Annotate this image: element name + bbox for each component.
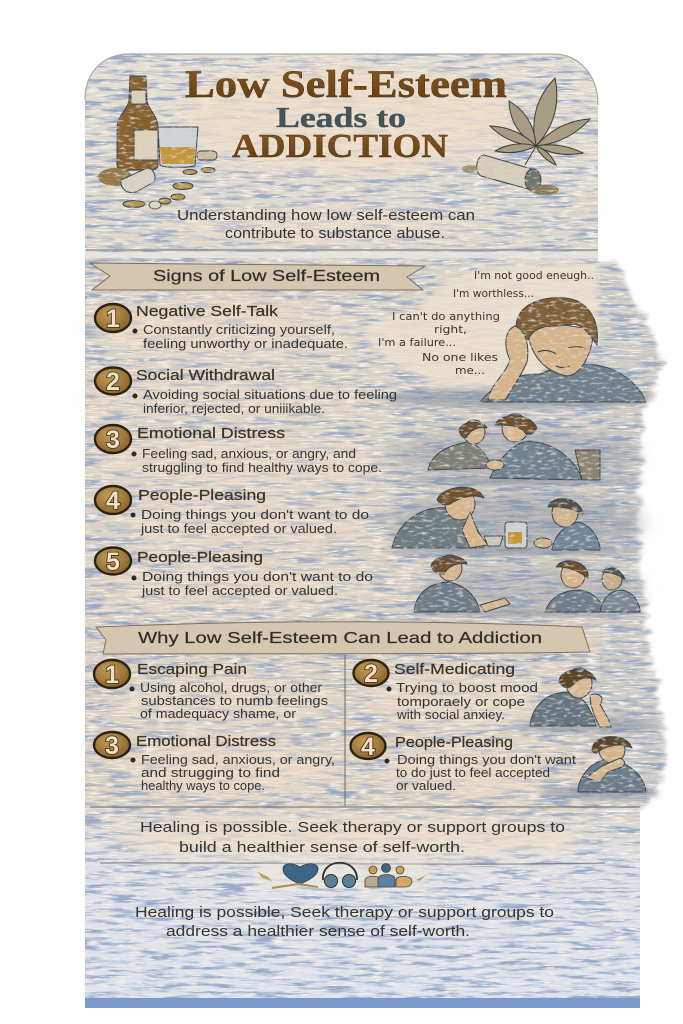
reason 2: Self-Medicating: tomporaely or cope <box>397 695 525 709</box>
sign 4: People-Pleasing: People-Pleasing <box>138 487 266 504</box>
cream washes over the text areas <box>85 65 590 862</box>
sign 5: People-Pleasing: 5 <box>106 548 120 576</box>
sign 4: People-Pleasing: just to feel accepted or valued. <box>140 522 337 536</box>
subtitle: contribute to substance abuse. <box>225 225 445 242</box>
illustration: boy handing a note to a group <box>414 555 640 612</box>
icon: cannabis leaf <box>490 78 590 165</box>
reason 3: Emotional Distress: 3 <box>105 732 119 760</box>
thought bubble text: I can't do anything <box>392 311 500 323</box>
sign 3: Emotional Distress: struggling to find healthy ways to cope. <box>142 461 382 475</box>
reason 3: Emotional Distress: healthy ways to cope. <box>141 779 265 793</box>
reason 1: Escaping Pain: Escaping Pain <box>137 661 247 678</box>
closing message: Healing is possible, Seek therapy or support groups to <box>135 904 554 921</box>
healing banner: Healing is possible. Seek therapy or support groups to <box>140 819 565 836</box>
title: Low Self-Esteem <box>185 63 507 106</box>
reason 3: Emotional Distress: Emotional Distress <box>136 733 276 750</box>
sign 5: People-Pleasing: just to feel accepted or valued. <box>141 584 338 598</box>
grey shading behind illustrations <box>385 387 660 800</box>
reason 2: Self-Medicating: 2 <box>364 660 378 688</box>
banner: Why Low Self-Esteem Can Lead to Addiction <box>96 622 590 654</box>
section frame lines <box>90 655 640 807</box>
reason 4: People-Pleasing: to do just to feel accepted <box>396 766 550 780</box>
sign 2: Social Withdrawal: inferior, rejected, or uniiikable. <box>143 402 325 416</box>
reason 1: Escaping Pain: 1 <box>105 661 119 689</box>
sign 5: People-Pleasing <box>95 548 373 598</box>
icon: liquor bottle <box>117 76 158 170</box>
reason 4: People-Pleasing: People-Pleasing <box>395 734 513 751</box>
reason 3: Emotional Distress <box>94 732 335 793</box>
illustration: boy with hand over face <box>578 736 646 792</box>
sign 3: Emotional Distress <box>95 425 382 475</box>
sign 3: Emotional Distress: 3 <box>106 426 120 454</box>
reason 2: Self-Medicating: Self-Medicating <box>394 661 515 678</box>
icon: heart on open book <box>272 864 318 888</box>
sign 1: Negative Self-Talk <box>95 303 348 351</box>
title <box>185 63 507 165</box>
reason 1: Escaping Pain: Using alcohol, drugs, or other <box>140 681 322 695</box>
icon: right sprig <box>416 873 428 881</box>
thought bubble text: I'm not good eneugh.. <box>474 270 594 282</box>
illustration: friends at a table with a drink <box>392 487 600 550</box>
healing banner: build a healthier sense of self-worth. <box>179 839 465 856</box>
reason 4: People-Pleasing <box>350 733 577 793</box>
banner: Signs of Low Self-Esteem: Signs of Low Self-Esteem <box>153 268 380 285</box>
thought bubble text: I'm a failure... <box>378 337 456 349</box>
section gap <box>85 252 598 258</box>
thought bubble text: me... <box>455 365 485 377</box>
illustration: sad boy holding his head <box>480 298 646 402</box>
reason 4: People-Pleasing: Doing things you don't want <box>397 753 577 767</box>
sign 5: People-Pleasing: People-Pleasing <box>137 549 263 566</box>
banner: Signs of Low Self-Esteem <box>90 263 425 290</box>
sign 1: Negative Self-Talk: Negative Self-Talk <box>136 303 279 320</box>
illustration: two friends talking <box>428 414 600 480</box>
icon: scattered pills <box>98 151 217 209</box>
reason 4: People-Pleasing: 4 <box>361 733 375 761</box>
subtitle <box>177 207 475 242</box>
healing banner <box>100 819 605 864</box>
banner: Why Low Self-Esteem Can Lead to Addiction: Why Low Self-Esteem Can Lead to Addiction <box>138 630 542 647</box>
sign 3: Emotional Distress: Feeling sad, anxious, or angry, and <box>142 447 356 461</box>
thought bubble text <box>378 270 594 377</box>
sign 3: Emotional Distress: Emotional Distress <box>137 425 285 442</box>
sign 2: Social Withdrawal: 2 <box>106 368 120 396</box>
thought bubble text: right, <box>434 324 467 336</box>
thought cloud background <box>362 263 598 389</box>
thought bubble text: No one likes <box>422 352 498 364</box>
sign 1: Negative Self-Talk: 1 <box>106 305 120 333</box>
reason 2: Self-Medicating: with social anxiey. <box>396 708 505 722</box>
subtitle: Understanding how low self-esteem can <box>177 207 475 224</box>
icon: whisky glass <box>158 127 198 167</box>
sign 1: Negative Self-Talk: Constantly criticizing yourself, <box>143 323 335 337</box>
sign 2: Social Withdrawal: Social Withdrawal <box>136 367 275 384</box>
sign 5: People-Pleasing: Doing things you don't want to do <box>142 570 373 584</box>
reason 3: Emotional Distress: and strugging to find <box>141 766 280 780</box>
reason 4: People-Pleasing: or valued. <box>396 779 456 793</box>
sign 1: Negative Self-Talk: feeling unworthy or inadequate. <box>143 337 348 351</box>
header rule <box>86 249 598 251</box>
illustration: boy with hand at chin <box>530 668 611 727</box>
sign 4: People-Pleasing <box>95 486 369 536</box>
sign 4: People-Pleasing: 4 <box>106 487 120 515</box>
bottom blue bar <box>85 998 640 1008</box>
reason 3: Emotional Distress: Feeling sad, anxious, or angry, <box>141 753 335 767</box>
closing message: address a healthier sense of self-worth. <box>166 923 470 940</box>
title: Leads to <box>276 103 406 134</box>
reason 1: Escaping Pain: of madequacy shame, or <box>140 707 296 721</box>
top edge outline <box>85 54 598 105</box>
icon: headphones <box>323 863 357 888</box>
support icons <box>255 863 428 888</box>
reason 1: Escaping Pain: substances to numb feelings <box>141 694 328 708</box>
reason 1: Escaping Pain <box>94 660 328 721</box>
icon: group of people <box>365 864 412 887</box>
paper background panel with torn right edge <box>85 54 664 1008</box>
icon: tipped pill bottle <box>461 155 559 195</box>
sign 2: Social Withdrawal: Avoiding social situations due to feeling <box>143 388 397 402</box>
closing message <box>135 904 554 940</box>
icon: left sprig <box>258 872 272 881</box>
reason 2: Self-Medicating: Trying to boost mood <box>396 681 538 695</box>
title: ADDICTION <box>232 128 448 165</box>
reason 2: Self-Medicating <box>354 660 538 722</box>
sign 2: Social Withdrawal <box>95 367 397 416</box>
thought bubble text: I'm worthless... <box>453 288 534 300</box>
sign 4: People-Pleasing: Doing things you don't want to do <box>141 508 369 522</box>
